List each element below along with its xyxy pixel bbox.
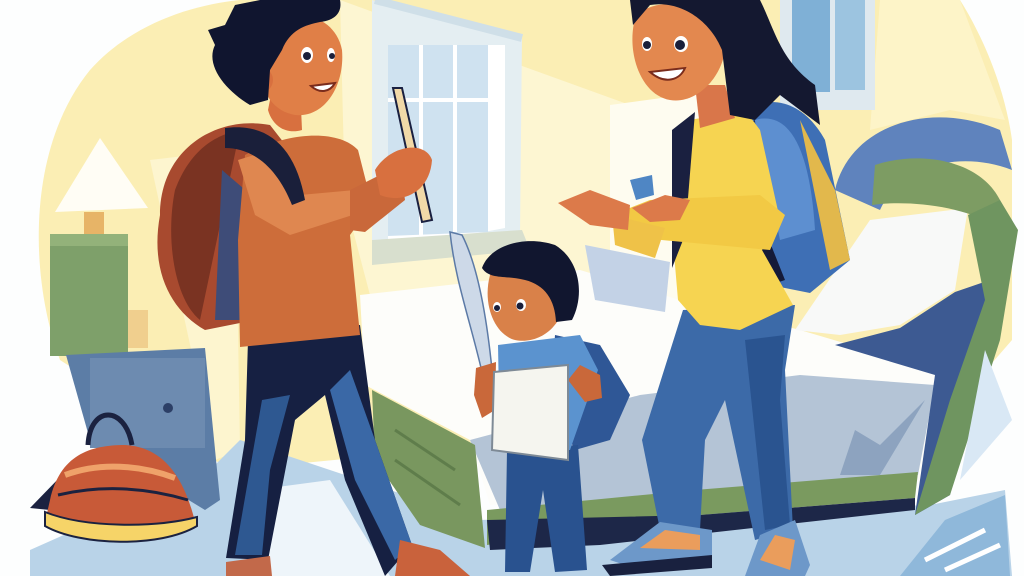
neck and head <box>695 85 735 128</box>
backpack <box>550 335 630 450</box>
head <box>268 85 302 131</box>
hands <box>558 190 630 230</box>
window: right <box>780 0 875 110</box>
blue nightstand <box>66 348 220 510</box>
bed <box>360 117 1018 550</box>
arms <box>474 362 496 418</box>
hands and pencil <box>393 88 432 222</box>
torso <box>672 110 793 330</box>
backpack strap <box>225 127 305 205</box>
window: center <box>372 0 530 265</box>
sword/ruler <box>450 232 492 372</box>
arm <box>350 165 405 232</box>
backpack <box>157 123 305 330</box>
hair <box>630 0 820 125</box>
shoes <box>226 556 272 576</box>
child figure with white paper <box>450 232 630 572</box>
hair <box>208 0 340 105</box>
torso <box>238 136 372 347</box>
red bag on floor <box>30 415 197 542</box>
mother figure with blue backpack <box>558 0 850 576</box>
father figure: older boy with red backpack <box>157 0 470 576</box>
legs <box>642 305 795 540</box>
arm <box>612 195 785 250</box>
green nightstand <box>50 234 148 356</box>
lamp <box>55 138 148 234</box>
paper <box>492 365 568 460</box>
shoes <box>610 522 712 570</box>
floor <box>30 440 1012 576</box>
legs <box>505 445 587 572</box>
backpack <box>720 102 850 293</box>
torso <box>498 335 598 450</box>
legs <box>226 325 412 576</box>
head <box>488 260 565 341</box>
